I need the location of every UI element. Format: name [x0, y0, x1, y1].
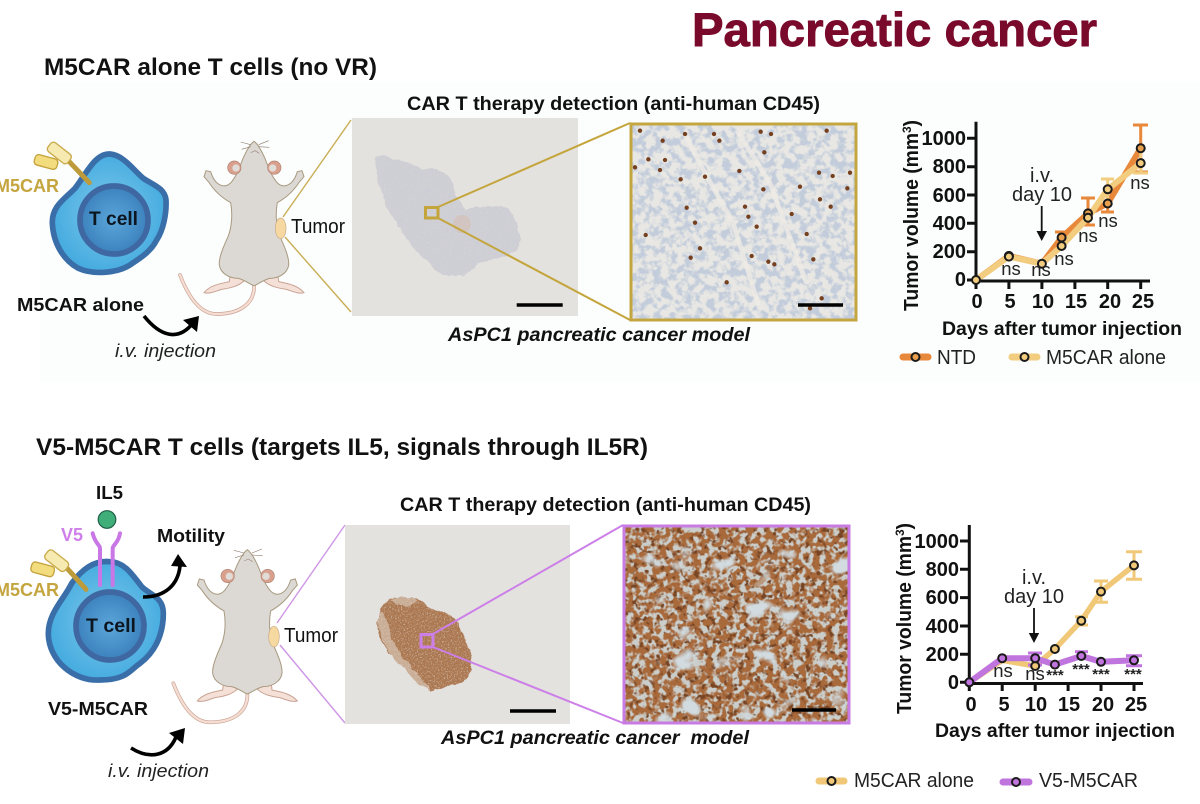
- icon: T cell with V5 and M5CAR: [0, 533, 163, 680]
- title: Pancreatic cancer: [692, 4, 1097, 57]
- significance labels: ns: [1025, 663, 1045, 684]
- y tick labels: 400: [933, 213, 966, 235]
- series: M5CAR alone: [969, 552, 1142, 682]
- icon: T cell with M5CAR: [0, 141, 166, 272]
- legend: NTD: [937, 347, 976, 369]
- y tick labels: [914, 531, 959, 694]
- arrow: motility: [143, 554, 187, 597]
- significance labels: ***: [1046, 667, 1064, 684]
- y tick labels: 600: [926, 587, 959, 609]
- icon: IL5 molecule: [98, 511, 116, 528]
- legend: [819, 770, 1138, 792]
- panel heading: M5CAR alone T cells (no VR): [44, 54, 377, 81]
- panel heading: V5-M5CAR T cells (targets IL5, signals through IL5R): [36, 434, 648, 461]
- chart: tumor volume, NTD vs M5CAR alone: [900, 120, 1182, 369]
- x tick labels: 0: [971, 291, 983, 313]
- dosing annotation: [1012, 165, 1072, 241]
- legend: M5CAR alone: [854, 770, 974, 792]
- tumor zoom lines: [283, 120, 351, 312]
- y axis title: Tumor volume (mm: [901, 127, 923, 311]
- significance labels: ***: [1072, 661, 1090, 678]
- y axis title: 3: [900, 126, 914, 133]
- y tick labels: 1000: [922, 128, 966, 150]
- significance labels: ns: [993, 660, 1013, 681]
- significance labels: ns: [1098, 210, 1118, 231]
- icon: T cell with V5 and M5CAR: T cell: [86, 615, 136, 637]
- y axis title: 3: [893, 529, 907, 536]
- zoom lines: [433, 525, 623, 723]
- cell label: V5-M5CAR: [48, 699, 148, 719]
- legend: M5CAR alone: [1046, 347, 1166, 369]
- dosing annotation: i.v.: [1022, 567, 1046, 589]
- x tick labels: 20: [1092, 694, 1114, 716]
- arrow: injection: [131, 728, 185, 755]
- x tick labels: 25: [1125, 694, 1147, 716]
- panel: M5CAR alone: [0, 54, 1182, 369]
- y tick labels: 0: [948, 672, 959, 694]
- x tick labels: [965, 694, 1147, 716]
- injection label: i.v. injection: [108, 761, 209, 781]
- x tick labels: 15: [1058, 694, 1080, 716]
- top panel background: [40, 82, 1200, 382]
- zoom lines: [438, 123, 630, 320]
- significance labels: ns: [1078, 225, 1098, 246]
- arrow: injection: [144, 316, 199, 335]
- x tick labels: 15: [1065, 291, 1087, 313]
- x tick labels: 0: [965, 694, 977, 716]
- tissue section image: [345, 525, 570, 724]
- y tick labels: 200: [933, 241, 966, 263]
- x tick labels: 10: [1032, 291, 1054, 313]
- markers: [1005, 144, 1145, 260]
- axes: [967, 122, 1150, 289]
- motility label: Motility: [157, 526, 225, 546]
- dosing annotation: [1004, 567, 1064, 643]
- significance labels: [1001, 172, 1150, 280]
- significance labels: ns: [1001, 258, 1021, 279]
- x tick labels: 25: [1132, 291, 1154, 313]
- x tick labels: [971, 291, 1154, 313]
- chart: tumor volume, M5CAR alone vs V5-M5CAR: [819, 523, 1175, 792]
- x tick labels: 20: [1099, 291, 1121, 313]
- significance labels: ***: [1124, 666, 1142, 683]
- dosing annotation: day 10: [1004, 586, 1064, 608]
- y tick labels: 1000: [914, 531, 959, 553]
- series: NTD: [976, 125, 1148, 280]
- y axis title: ): [901, 120, 923, 126]
- significance labels: [993, 660, 1142, 684]
- y tick labels: 600: [933, 185, 966, 207]
- icon: mouse: [180, 141, 304, 314]
- y axis title: Tumor volume (mm: [894, 530, 916, 714]
- y tick labels: 0: [955, 269, 966, 291]
- tissue section image: [352, 118, 578, 316]
- legend: [903, 347, 1166, 369]
- model caption: AsPC1 pancreatic cancer model: [447, 324, 751, 346]
- model caption: AsPC1 pancreatic cancer model: [440, 727, 750, 749]
- significance labels: ns: [1031, 259, 1051, 280]
- y tick labels: 200: [926, 644, 959, 666]
- x tick labels: 5: [1004, 291, 1016, 313]
- x tick labels: 10: [1025, 694, 1047, 716]
- y tick labels: 400: [926, 616, 959, 638]
- cell label: M5CAR alone: [17, 294, 144, 315]
- detection heading: CAR T therapy detection (anti-human CD45): [407, 93, 820, 115]
- series: V5-M5CAR: [969, 652, 1142, 682]
- series: M5CAR alone: [976, 152, 1148, 280]
- panel: V5-M5CAR: [0, 434, 1175, 792]
- dosing annotation: day 10: [1012, 184, 1072, 206]
- significance labels: ns: [1130, 172, 1150, 193]
- tumor label: Tumor: [291, 216, 345, 238]
- markers: [1031, 561, 1138, 670]
- tumor label: Tumor: [284, 625, 338, 647]
- x axis title: Days after tumor injection: [935, 720, 1175, 742]
- axes: [960, 525, 1143, 691]
- y tick labels: 800: [933, 156, 966, 178]
- icon: T cell with M5CAR: T cell: [89, 208, 138, 230]
- tumor zoom lines: [277, 525, 345, 723]
- V5 label: V5: [61, 525, 83, 545]
- y tick labels: [922, 128, 966, 291]
- detection heading: CAR T therapy detection (anti-human CD45): [400, 494, 811, 516]
- dosing annotation: i.v.: [1030, 165, 1054, 187]
- significance labels: ns: [1054, 248, 1074, 269]
- IL5 label: IL5: [96, 483, 123, 503]
- y axis title: ): [894, 523, 916, 529]
- y tick labels: 800: [926, 559, 959, 581]
- significance labels: ***: [1092, 666, 1110, 683]
- icon: mouse: [173, 549, 297, 722]
- injection label: i.v. injection: [115, 341, 216, 361]
- micrograph inset: [631, 124, 856, 320]
- x axis title: Days after tumor injection: [942, 318, 1182, 340]
- legend: V5-M5CAR: [1039, 770, 1138, 792]
- micrograph inset: [624, 526, 849, 723]
- x tick labels: 5: [998, 694, 1010, 716]
